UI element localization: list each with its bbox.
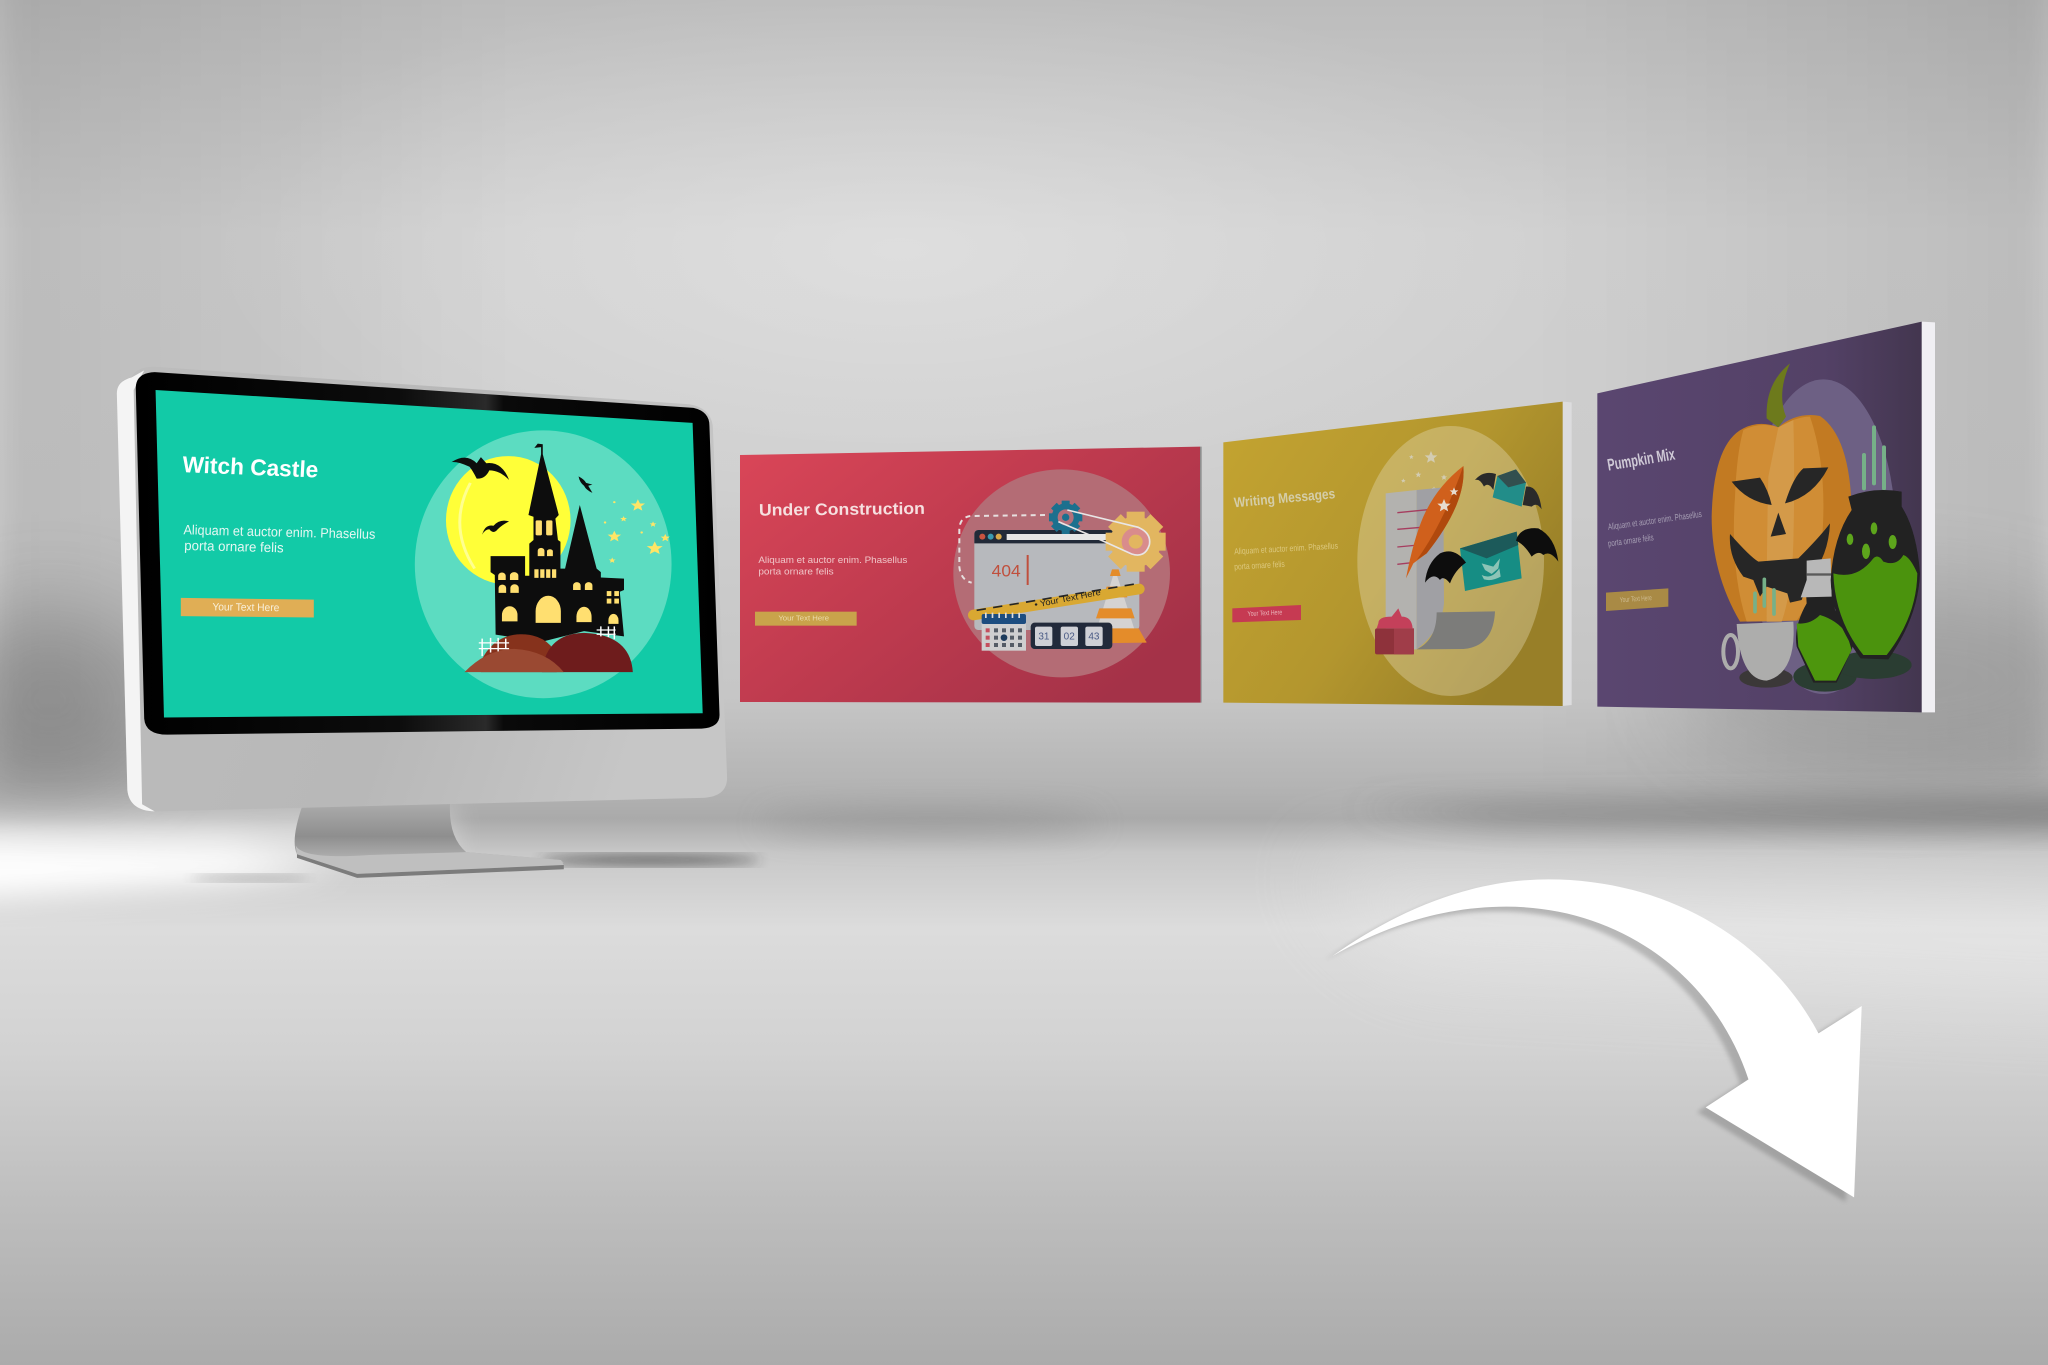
slide button xyxy=(181,598,314,617)
panel: under construction slide xyxy=(740,447,1202,703)
pumpkin mouth xyxy=(1730,523,1830,603)
small envelope xyxy=(1493,469,1526,507)
slide body text: porta ornare felis xyxy=(1234,559,1286,572)
monitor screen xyxy=(156,390,703,717)
teacup handle xyxy=(1723,635,1738,668)
illustration: witch castle xyxy=(415,430,672,698)
paper curl xyxy=(1417,611,1495,649)
pale circle xyxy=(953,469,1170,677)
arrow: large white curved arrow xyxy=(1324,879,1862,1202)
green bubbles xyxy=(1847,522,1897,559)
slide body text: Aliquam et auctor enim. Phasellus xyxy=(183,523,376,542)
slide body text: porta ornare felis xyxy=(184,539,284,556)
teacup xyxy=(1737,622,1794,681)
slide body text xyxy=(183,523,376,556)
large potion xyxy=(1831,490,1920,659)
pumpkin eyes xyxy=(1732,478,1772,505)
slide edge xyxy=(1563,402,1572,706)
slide body text: Aliquam et auctor enim. Phasellus xyxy=(1234,541,1339,556)
dotted path xyxy=(959,515,1045,583)
green liquid xyxy=(1833,555,1917,655)
monitor stand neck xyxy=(295,801,564,872)
bat left xyxy=(482,521,509,535)
slide edge xyxy=(1922,322,1935,712)
panel: pumpkin mix slide xyxy=(1597,322,1935,712)
traffic cone xyxy=(1083,569,1147,643)
pumpkin body xyxy=(1712,415,1852,622)
small potion cap xyxy=(1801,558,1832,597)
illustration: construction: • Your Text Here xyxy=(1033,587,1102,610)
arrow shape xyxy=(1333,879,1862,1197)
sparkle stars xyxy=(1401,451,1447,502)
slide body text xyxy=(1234,541,1339,572)
ink jar xyxy=(1375,628,1414,654)
belt xyxy=(1058,510,1150,555)
quill feather xyxy=(1406,466,1464,578)
bat right xyxy=(579,476,592,493)
potion steam xyxy=(1864,427,1884,488)
browser window xyxy=(974,530,1139,630)
fences xyxy=(479,626,616,656)
slide background xyxy=(1223,402,1563,706)
slide body text xyxy=(758,555,908,576)
pumpkin nose xyxy=(1771,513,1786,537)
monitor base top xyxy=(296,845,564,874)
hills xyxy=(481,634,557,672)
envelope face xyxy=(1482,558,1501,580)
slide button: Your Text Here xyxy=(778,613,829,622)
slide title: Witch Castle xyxy=(182,452,319,483)
panel: writing messages slide xyxy=(1223,402,1572,706)
countdown xyxy=(1031,623,1112,649)
slide title: Writing Messages xyxy=(1233,485,1336,510)
teal circle xyxy=(415,430,672,698)
illustration: messages xyxy=(1357,426,1558,696)
slide button: Your Text Here xyxy=(1620,593,1652,604)
404 text: 404 xyxy=(992,562,1021,581)
slide button xyxy=(1232,605,1301,622)
gold gear xyxy=(1106,512,1166,572)
large envelope xyxy=(1460,532,1522,591)
blue gear xyxy=(1049,501,1082,534)
paper scroll xyxy=(1386,490,1417,649)
slide background xyxy=(1597,322,1922,712)
large bat wings xyxy=(1425,551,1466,583)
slide button xyxy=(755,612,857,626)
moon highlight xyxy=(460,483,475,569)
illustration: construction: 31 xyxy=(1038,631,1050,642)
potion shadows xyxy=(1793,662,1857,692)
slide body text xyxy=(1607,509,1703,549)
monitor bezel xyxy=(136,372,720,735)
slide body text: porta ornare felis xyxy=(758,566,834,576)
slide background xyxy=(740,447,1201,703)
illustration: construction: 43 xyxy=(1088,631,1100,642)
slide button: Your Text Here xyxy=(1247,609,1282,618)
text lines xyxy=(1397,509,1432,564)
slide body text: Aliquam et auctor enim. Phasellus xyxy=(1607,509,1703,532)
pale circle xyxy=(1751,379,1896,694)
slide button xyxy=(1606,588,1668,611)
browser title bar xyxy=(974,530,1127,543)
slide title: Pumpkin Mix xyxy=(1606,445,1677,475)
cup steam xyxy=(1755,579,1774,614)
monitor shadows on the floor xyxy=(190,855,760,881)
illustration: construction: 02 xyxy=(1064,631,1075,642)
stars xyxy=(604,499,670,563)
slide title: Under Construction xyxy=(759,499,925,520)
illustration: pumpkin and potions xyxy=(1712,363,1920,694)
monitor base rim xyxy=(297,854,564,878)
small potion xyxy=(1796,577,1853,683)
calendar xyxy=(982,623,1026,651)
bat top xyxy=(451,457,509,480)
castle silhouette xyxy=(491,444,624,642)
monitor body xyxy=(117,367,727,811)
right edge xyxy=(1200,447,1202,703)
feather stars xyxy=(1437,487,1458,511)
caution tape xyxy=(973,589,1139,615)
cup shadow xyxy=(1739,668,1793,688)
castle windows xyxy=(498,520,619,624)
slide body text: porta ornare felis xyxy=(1607,532,1655,549)
arrow shadow xyxy=(1324,884,1853,1202)
monitor left edge xyxy=(117,370,155,811)
pumpkin stem xyxy=(1767,363,1790,427)
small bat wings xyxy=(1475,473,1496,490)
illustration: construction xyxy=(953,469,1170,677)
monitor xyxy=(117,367,727,878)
slide body text: Aliquam et auctor enim. Phasellus xyxy=(758,555,908,565)
moon xyxy=(446,456,571,585)
slide button: Your Text Here xyxy=(212,601,279,614)
pale circle xyxy=(1357,426,1544,696)
pumpkin highlights xyxy=(1734,417,1823,622)
